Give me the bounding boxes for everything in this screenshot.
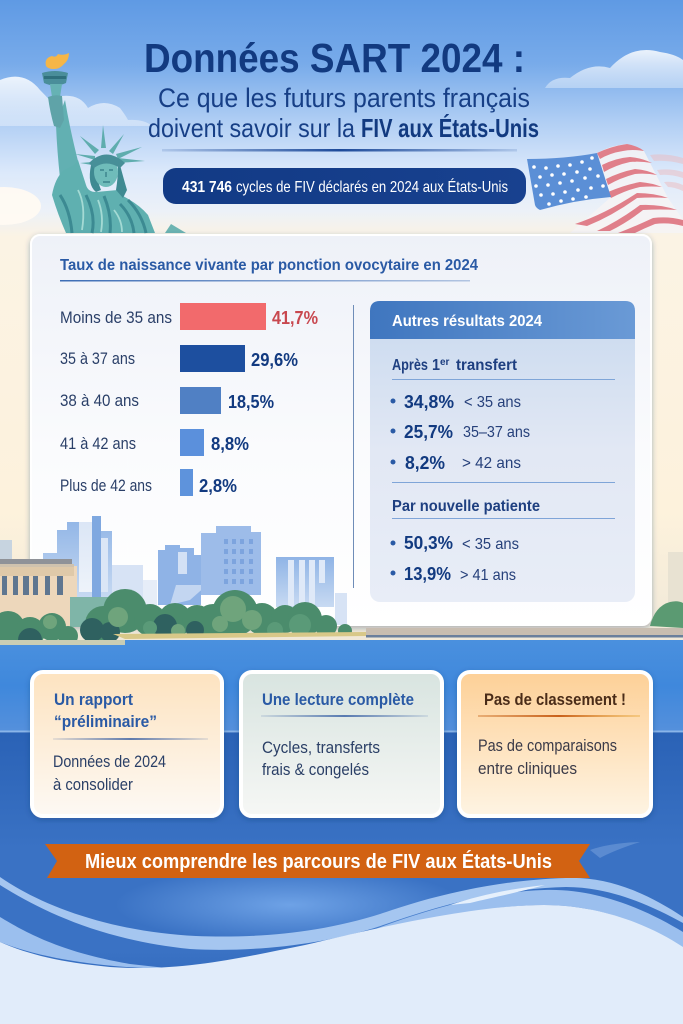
title line 2: Ce que les futurs parents français (158, 83, 530, 113)
right-side background building (668, 552, 683, 607)
result: 25,7% (390, 422, 530, 442)
row: 38 à 40 ans: 38 à 40 ans (60, 392, 139, 410)
hair (90, 165, 127, 198)
card: pas de classement (459, 672, 651, 816)
card heading: Un rapport (54, 690, 133, 709)
subheading: après 1er transfert: 1 (432, 357, 440, 374)
title (144, 35, 539, 143)
icon: Statue of Liberty (42, 53, 186, 233)
result: 50,3%: 50,3% (404, 533, 453, 553)
row: 35 à 37 ans: 29,6% (251, 350, 298, 370)
teal low building (70, 597, 110, 627)
card text line 2: à consolider (53, 776, 133, 794)
pill number: 431 746 (182, 179, 232, 196)
card text line 2: entre cliniques (478, 760, 577, 778)
red stripes (575, 144, 683, 233)
ribbon text: Mieux comprendre les parcours de FIV aux États-Unis (85, 850, 552, 873)
row: 38 à 40 ans: 18,5% (228, 392, 274, 412)
main panel (31, 235, 651, 625)
robe (52, 160, 155, 233)
faded far stripes (650, 154, 683, 191)
windows (224, 539, 253, 584)
card text line 2: frais & congelés (262, 761, 369, 779)
right trees (650, 601, 683, 628)
card text: Cycles, transferts (262, 739, 380, 757)
result: 8,2% (390, 453, 521, 473)
result: 50,3%: < 35 ans (462, 536, 519, 553)
panel header text: Autres résultats 2024 (392, 313, 542, 330)
result: 25,7%: 25,7% (404, 422, 453, 442)
card: une lecture complète (241, 672, 442, 816)
panel header (370, 301, 635, 339)
subheading: par nouvelle patiente: Par nouvelle patiente (392, 498, 540, 515)
row: 41 à 42 ans (60, 429, 249, 456)
result: 25,7%: 35–37 ans (463, 424, 530, 441)
row: 41 à 42 ans: 41 à 42 ans (60, 435, 136, 453)
ribbon banner (45, 844, 590, 878)
subheading: après 1er transfert: Après (392, 357, 428, 374)
result: 34,8% (390, 392, 521, 412)
chart heading: Taux de naissance vivante par ponction ovocytaire en 2024 (60, 257, 478, 274)
subheading: après 1er transfert: transfert (456, 357, 518, 374)
title line 3: doivent savoir sur la (148, 113, 355, 143)
result: 13,9% (390, 564, 516, 584)
row: moins de 35 ans (60, 303, 318, 330)
robe highlights (78, 190, 122, 232)
robe folds (60, 195, 146, 233)
title line 3 bold: FIV aux États-Unis (361, 113, 539, 143)
bar chart (60, 303, 318, 496)
trees (0, 589, 352, 640)
result: 8,2%: 8,2% (405, 453, 445, 473)
classical building (0, 559, 77, 626)
row: plus de 42 ans (60, 469, 237, 496)
pill text: cycles de FIV déclarés en 2024 aux États-Unis (236, 177, 508, 196)
card: un rapport préliminaire (32, 672, 222, 816)
row: moins de 35 ans: 41,7% (272, 308, 318, 328)
canton (527, 153, 611, 210)
result: 34,8%: < 35 ans (464, 394, 521, 411)
result: 13,9%: > 41 ans (460, 567, 516, 584)
row: plus de 42 ans: 2,8% (199, 476, 237, 496)
card heading line 2: “préliminaire” (54, 712, 157, 731)
torch (42, 71, 68, 86)
subheading: après 1er transfert (392, 357, 518, 374)
card text: Données de 2024 (53, 753, 166, 771)
row: plus de 42 ans: Plus de 42 ans (60, 477, 152, 495)
head (94, 157, 118, 187)
card heading: Une lecture complète (262, 690, 414, 709)
flame (46, 53, 69, 69)
clouds (0, 50, 683, 225)
shoreline scene: skyline and trees (0, 516, 683, 652)
lower blue area (0, 732, 683, 1024)
card text: Pas de comparaisons (478, 737, 617, 755)
banks (113, 632, 366, 639)
raised arm (56, 100, 79, 178)
white stripes (570, 144, 683, 233)
pill: cycles count (163, 168, 526, 204)
panel: autres résultats (370, 301, 635, 602)
rays (75, 125, 145, 165)
face (100, 170, 113, 182)
row: 35 à 37 ans (60, 345, 298, 372)
skyline (43, 516, 347, 625)
subheading: après 1er transfert: er (440, 357, 450, 368)
crown (89, 154, 125, 168)
card heading: Pas de classement ! (484, 690, 626, 709)
left-side background building (0, 540, 12, 560)
result: 50,3% (390, 533, 519, 553)
stars (532, 156, 605, 206)
row: 41 à 42 ans: 8,8% (211, 434, 249, 454)
result: 8,2%: > 42 ans (462, 455, 521, 472)
row: 35 à 37 ans: 35 à 37 ans (60, 350, 135, 368)
icon: American flag (527, 144, 683, 233)
background: sky (0, 0, 683, 640)
result: 13,9%: 13,9% (404, 564, 451, 584)
result: 34,8%: 34,8% (404, 392, 454, 412)
title line 1: Données SART 2024 : (144, 35, 525, 81)
book (165, 224, 186, 233)
water (0, 640, 683, 732)
row: moins de 35 ans: Moins de 35 ans (60, 309, 172, 327)
bottom waves (0, 842, 683, 1024)
row: 38 à 40 ans (60, 387, 274, 414)
